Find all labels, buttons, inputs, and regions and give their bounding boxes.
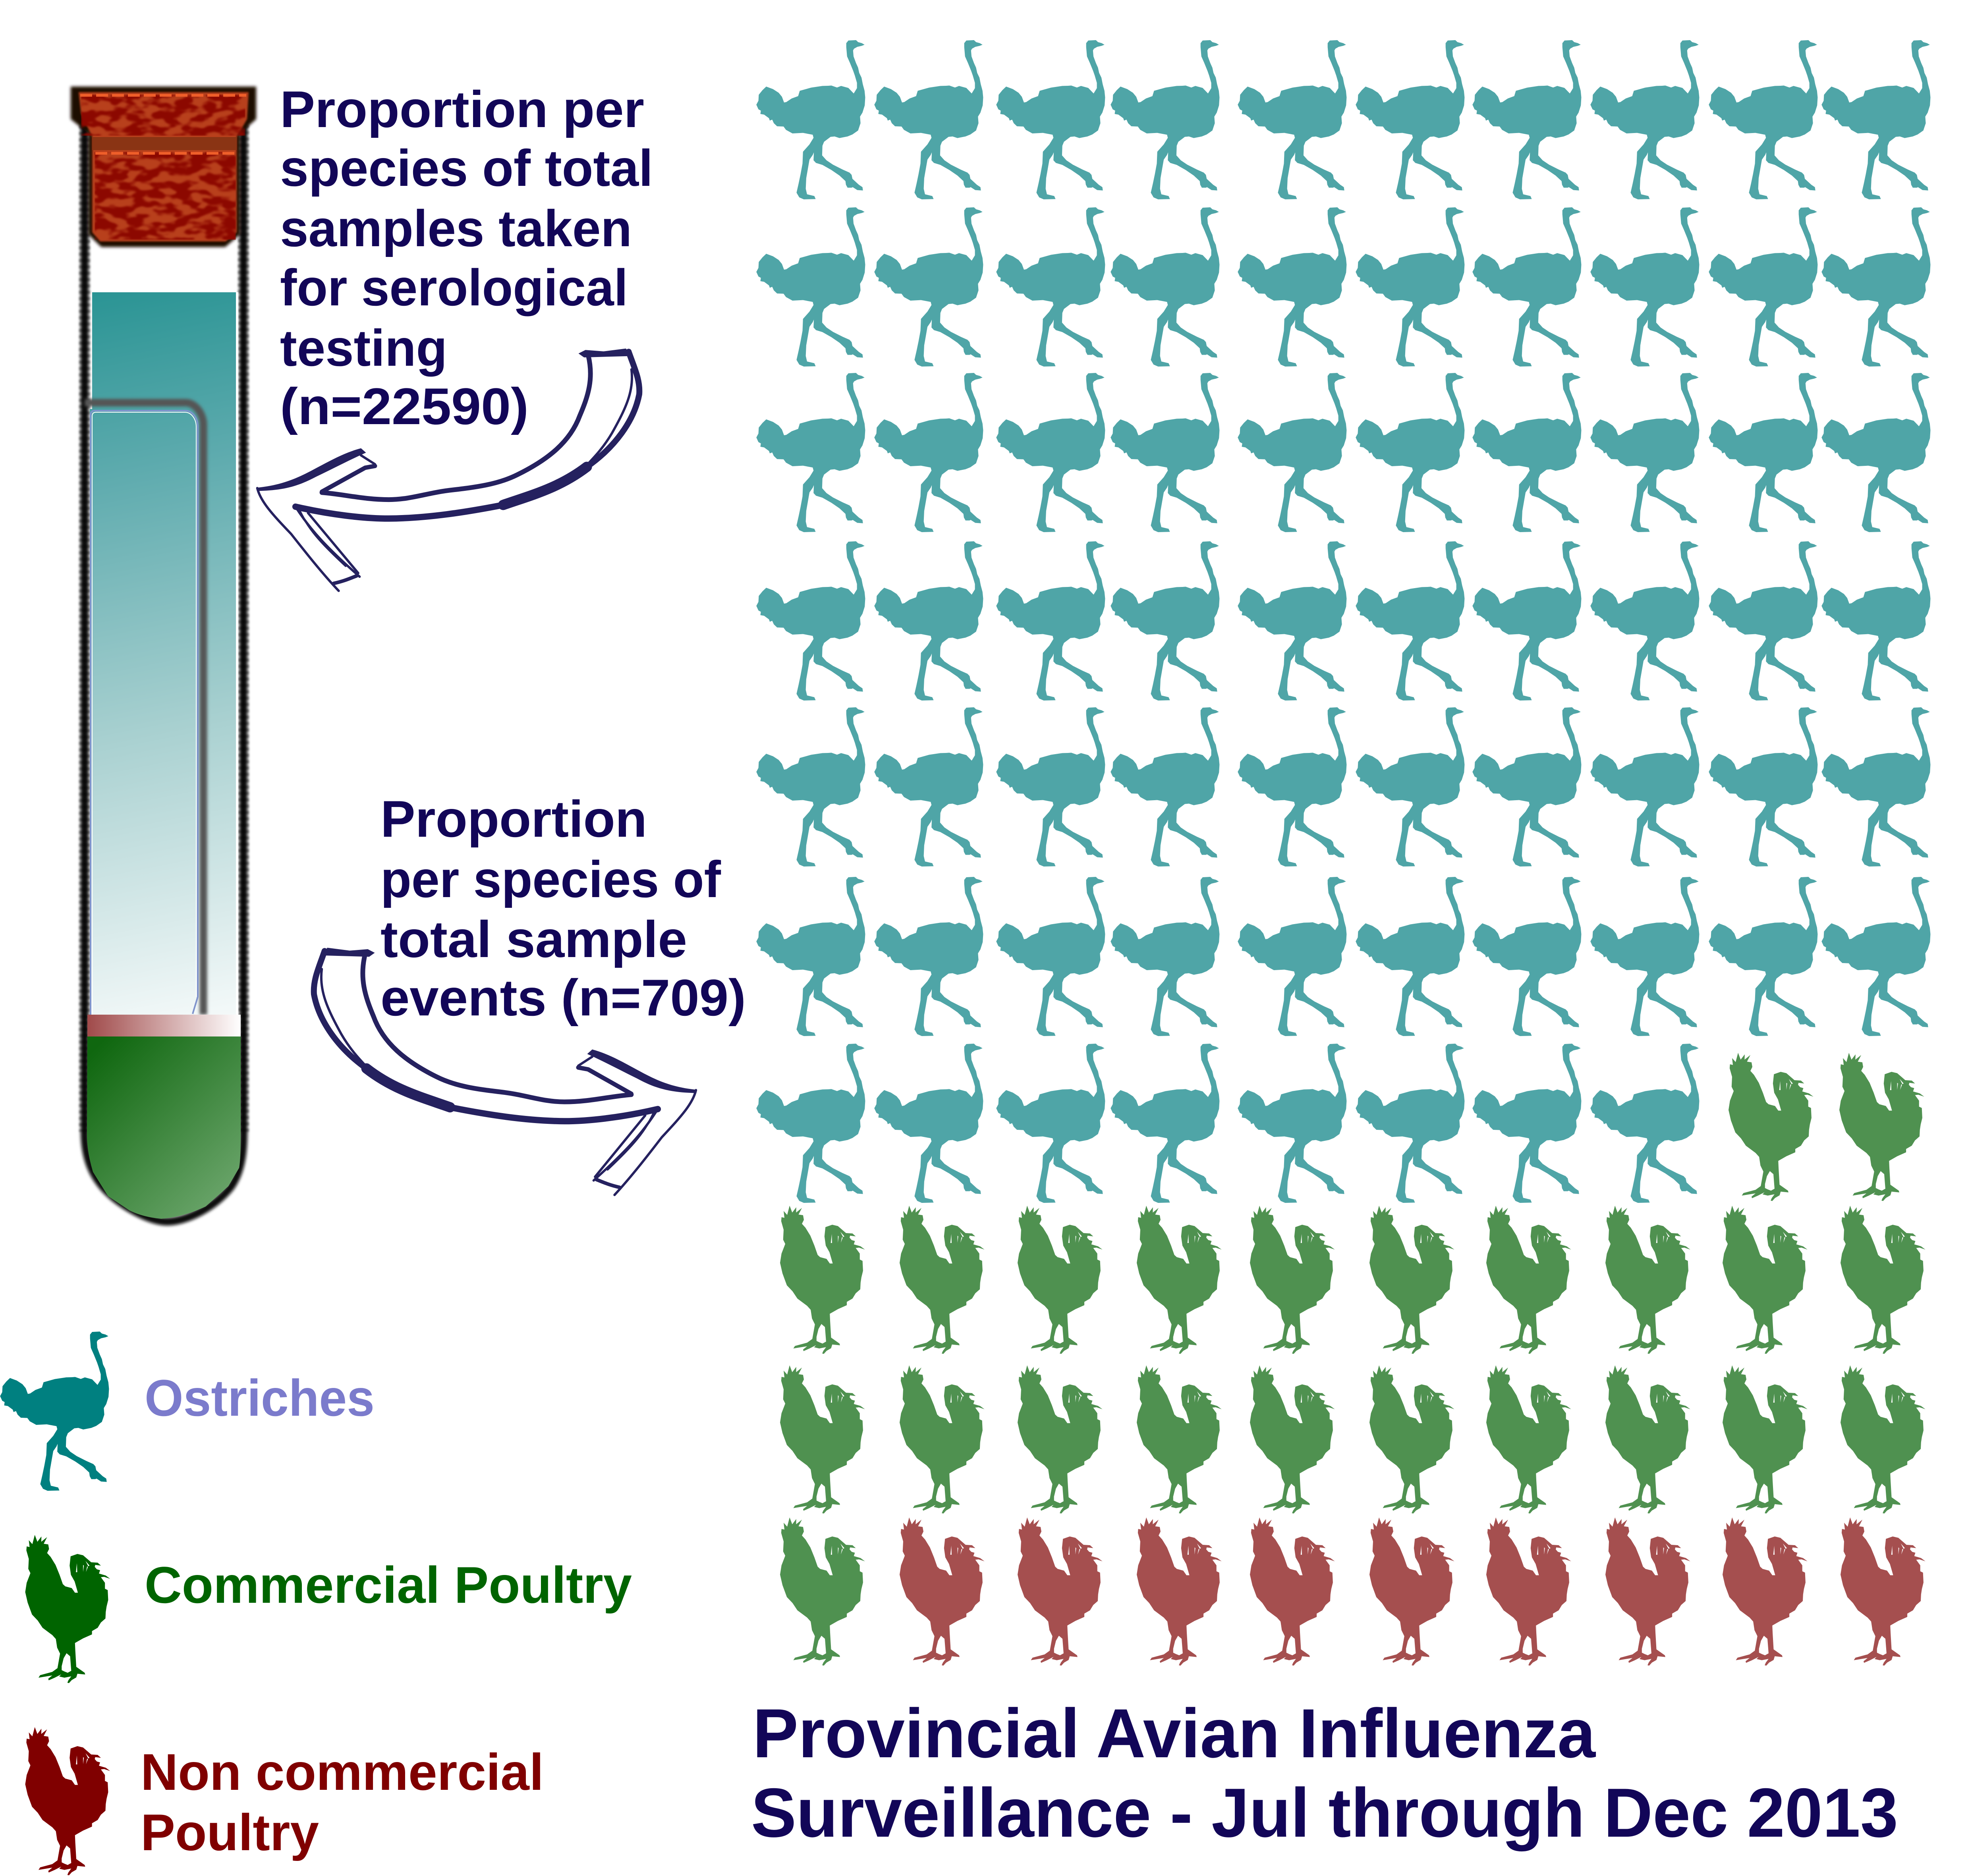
title: Surveillance - Jul through Dec 2013 [751,1774,1898,1852]
text: proportion of samples: testing [280,319,447,377]
text: proportion of samples: for serological [280,259,628,317]
pictogram grid of sample events [756,40,1930,1666]
ostrich row 3 [756,373,1930,532]
text: proportion of samples: (n=22590) [280,377,529,435]
ostrich row 2 [756,207,1930,367]
ostrich row 1 [756,40,1930,199]
test tube cap [71,87,256,247]
text: proportion of sample events [380,790,746,1027]
ostrich row 6 [756,877,1930,1036]
arrow: events to pictogram [314,948,697,1195]
ostrich row 7 [756,1044,1699,1203]
legend label: non commercial poultry: Non commercial [141,1743,544,1801]
commercial poultry row 7 [1729,1053,1924,1201]
legend label: commercial poultry: Commercial Poultry [145,1556,632,1614]
text: proportion of samples: Proportion per [280,80,644,138]
commercial poultry row 9 [780,1365,1926,1513]
legend [0,1332,632,1875]
title: Provincial Avian Influenza [753,1695,1596,1772]
legend icon: non commercial poultry [25,1727,110,1875]
text: proportion of sample events: total sample [380,910,687,968]
legend icon: ostrich [0,1332,109,1491]
commercial poultry row 10 [780,1517,865,1666]
text: proportion of sample events: per species of [380,850,721,908]
text: proportion of samples: species of total [280,139,653,197]
text: proportion of sample events: events (n=709) [380,969,746,1027]
legend icon: commercial poultry [25,1535,110,1683]
ostrich row 4 [756,541,1930,701]
test tube [71,87,256,1222]
tube fill: commercial poultry [87,1036,241,1219]
title [751,1695,1898,1852]
ostrich row 5 [756,707,1930,867]
text: proportion of samples: samples taken [280,199,632,257]
tube outline [85,119,243,1222]
arrow: samples to tube [257,349,639,591]
text: proportion of samples [280,80,653,435]
tube liquid: ostrich samples [85,292,238,1015]
non commercial poultry row 10 [900,1517,1926,1666]
text: proportion of sample events: Proportion [380,790,647,848]
legend label: non commercial poultry: Poultry [141,1803,319,1861]
legend label: ostriches: Ostriches [145,1369,375,1427]
commercial poultry row 8 [780,1206,1926,1354]
inner tube line [85,403,203,1015]
tube band: non commercial poultry [87,1015,241,1036]
legend label: non commercial poultry [141,1743,544,1861]
